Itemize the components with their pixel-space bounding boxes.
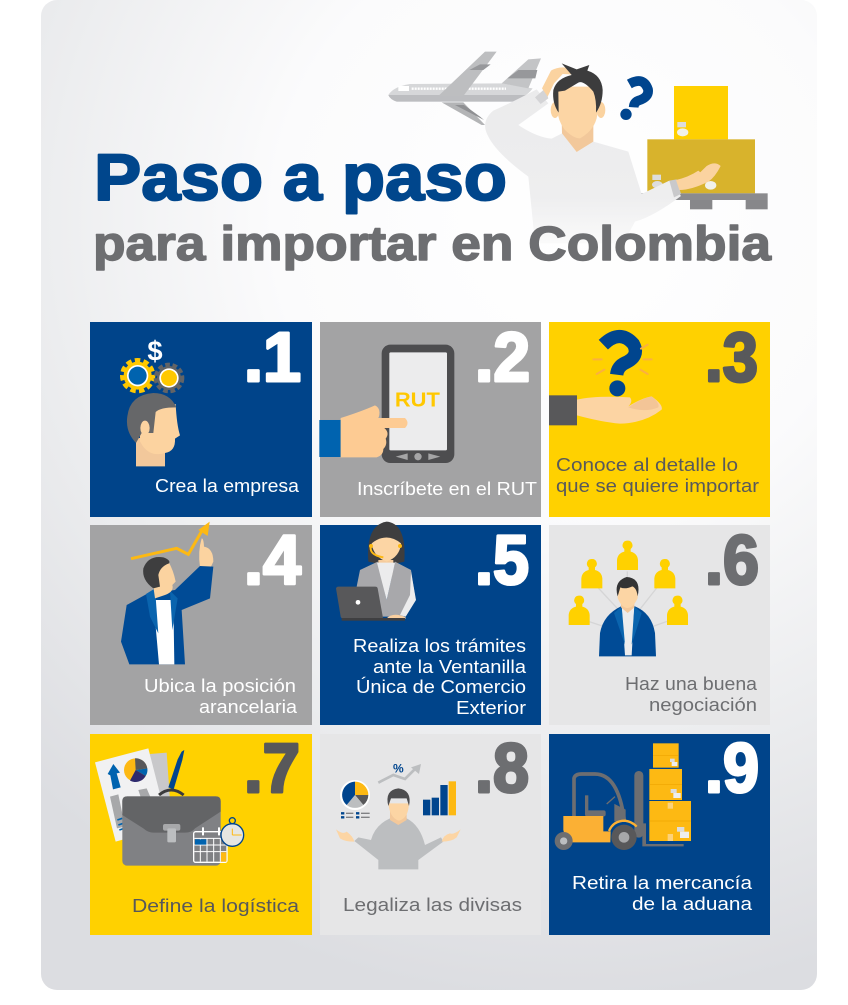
step label: Única de Comercio [356,676,526,697]
panel: step 1 [90,318,312,517]
icon: man with charts: % [393,762,404,776]
illustration: airplane [388,52,541,125]
step number: .5 [475,521,529,599]
panel: step 5 [320,521,541,725]
step label: Ubica la posición [144,676,296,696]
step label: Exterior [456,698,526,718]
step number: .8 [475,729,529,807]
step label: ante la Ventanilla [373,657,527,677]
step label: Conoce al detalle lo [556,455,738,475]
icon: hand with question mark [549,336,662,425]
icon: phone with RUT [319,345,454,463]
step number: .9 [705,729,759,807]
man [485,63,721,243]
step number: .2 [475,318,530,396]
panel: step 6 [549,521,770,725]
icon: network of people [569,541,688,656]
step number: .3 [705,318,758,396]
panel: step 9 [549,729,770,935]
step label: Haz una buena [625,674,758,694]
icon: forklift with boxes [555,743,691,850]
panel: step 4 [90,521,312,725]
step label: que se quiere importar [556,476,759,496]
step label: Retira la mercancía [572,873,753,893]
illustration: confused man with boxes [485,63,768,243]
step number: .6 [705,521,759,599]
step label: Define la logística [132,896,300,916]
step number: .7 [244,729,300,807]
step label: de la aduana [632,894,753,914]
step label: Realiza los trámites [353,636,526,656]
panel: step 8 [320,729,541,935]
step label: Legaliza las divisas [343,895,522,915]
boxes on pallet [640,86,768,209]
step number: .1 [244,318,301,396]
panel: step 2 [319,318,541,517]
step number: .4 [244,521,301,599]
icon: man pointing at trend line [121,522,213,664]
icon: question mark [620,81,648,120]
icon: head with gears: $ [147,336,163,367]
title [93,140,771,271]
step label: negociación [649,695,757,715]
step label: arancelaria [199,697,298,717]
step label: Inscríbete en el RUT [357,479,537,499]
heading: Paso a paso: Paso a paso [94,140,507,214]
icon: woman at laptop [336,522,416,621]
subheading: para importar en Colombia [93,218,771,271]
panel: step 3 [549,318,770,517]
icon: man with charts [336,762,461,869]
icon: briefcase with documents [95,748,244,866]
icon: phone with RUT: RUT [395,389,440,411]
panel: step 7 [90,729,312,935]
icon: head with gears [122,336,182,466]
step label: Crea la empresa [155,476,300,496]
